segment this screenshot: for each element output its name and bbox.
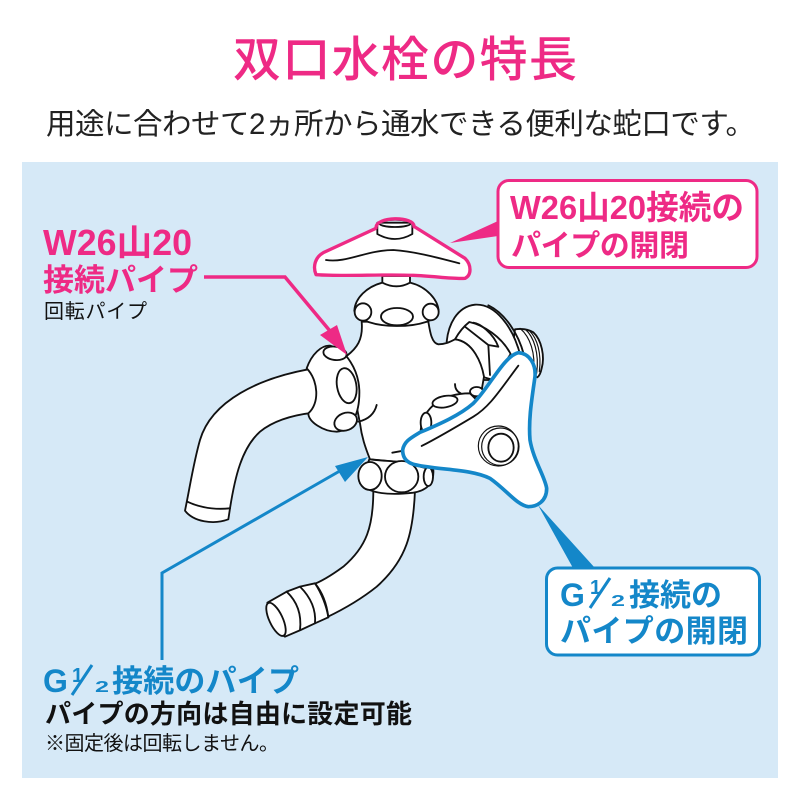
callout: W26 pipe open/close — [450, 180, 757, 268]
label: W26 connection pipe: 回転パイプ — [44, 300, 147, 323]
body — [347, 322, 484, 463]
callout: W26 pipe open/close: パイプの開閉 — [511, 230, 689, 263]
label: G1/2 connection pipe: 1 — [72, 665, 83, 687]
rear handle lump — [358, 384, 483, 453]
callout: G1/2 pipe open/close — [538, 505, 760, 655]
handle: G1/2 front, blue — [403, 353, 547, 507]
label: G1/2 connection pipe — [43, 663, 412, 755]
label: G1/2 connection pipe: 接続のパイプ — [112, 664, 299, 699]
label: W26 connection pipe — [43, 222, 198, 323]
label: W26 connection pipe: W26山20 — [43, 222, 192, 263]
label: G1/2 connection pipe: 2 — [95, 679, 109, 696]
title: 双口水栓の特長 — [233, 34, 577, 87]
bonnet and stem — [354, 276, 439, 326]
callout: G1/2 pipe open/close: 接続の — [629, 578, 722, 613]
label: W26 connection pipe: 接続パイプ — [43, 263, 198, 298]
label: G1/2 connection pipe: G — [43, 663, 68, 699]
label: G1/2 connection pipe: パイプの方向は自由に設定可能 — [45, 699, 412, 729]
left spout — [185, 345, 360, 522]
callout: G1/2 pipe open/close: G — [560, 577, 585, 613]
callout: G1/2 pipe open/close: 1 — [590, 577, 601, 599]
callout: W26 pipe open/close: W26山20接続の — [510, 189, 744, 226]
label: G1/2 connection pipe: ※固定後は回転しません。 — [45, 732, 279, 755]
back flange and thread — [447, 305, 543, 380]
leader: blue arrow to lower pipe — [162, 457, 368, 660]
lower swivel pipe — [262, 459, 433, 638]
handle: W26 top, pink — [315, 219, 470, 279]
callout: G1/2 pipe open/close: 2 — [611, 593, 625, 610]
leader: pink arrow to swivel pipe — [204, 277, 347, 355]
panel: background — [22, 162, 778, 778]
subtitle: 用途に合わせて2ヵ所から通水できる便利な蛇口です。 — [46, 108, 755, 141]
illustration: double faucet — [185, 219, 547, 638]
callout: G1/2 pipe open/close: パイプの開閉 — [560, 614, 748, 649]
